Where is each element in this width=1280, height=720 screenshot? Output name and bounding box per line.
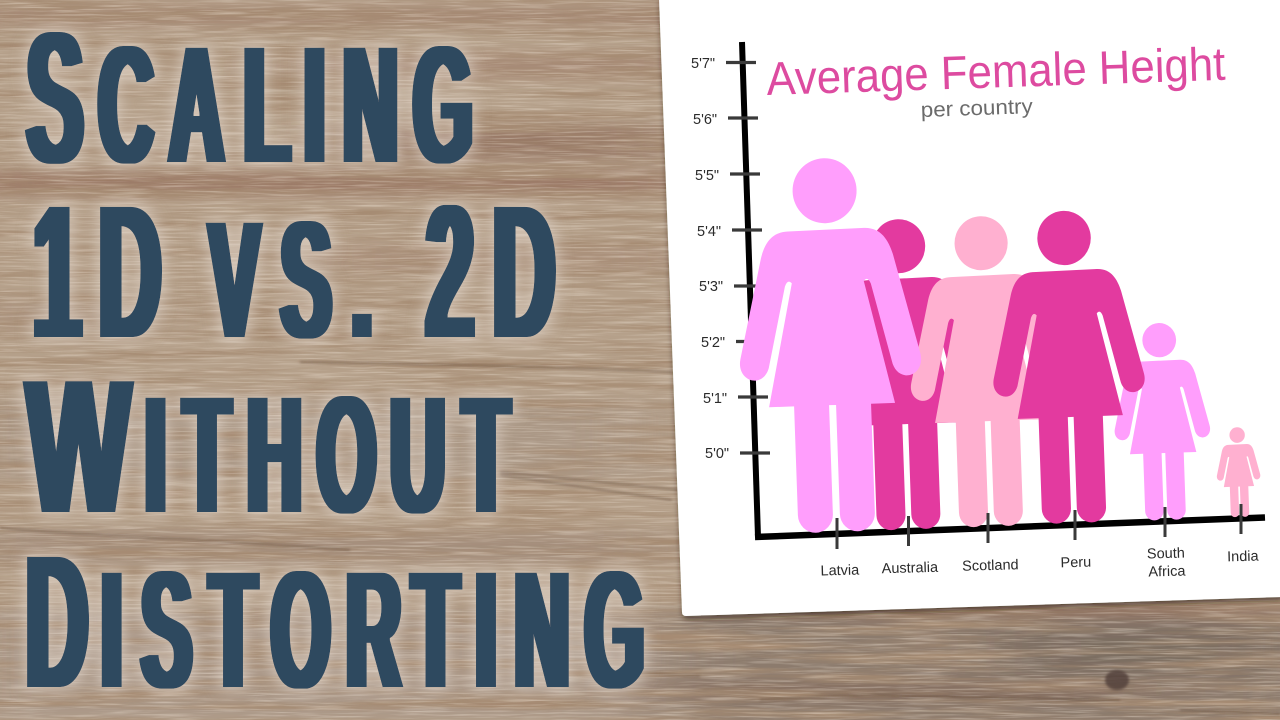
x axis labels: Africa (1148, 563, 1187, 580)
chart title: Average Female Height (766, 37, 1226, 105)
y axis labels: 5'1" (703, 391, 727, 407)
x axis ticks (837, 504, 1241, 549)
y axis labels: 5'4" (697, 224, 721, 240)
title line: 1D vs. 2D: 1D (33, 164, 161, 379)
x axis labels: Latvia (820, 562, 860, 580)
y axis ticks (726, 62, 770, 453)
figure: Scotland (905, 214, 1066, 529)
title line: Scaling: CALING (99, 10, 473, 199)
title line: Distorting: ISTORTING (101, 535, 644, 720)
y axis labels (691, 56, 729, 462)
figure: Peru (987, 208, 1150, 526)
x axis labels: Scotland (962, 557, 1019, 575)
x axis labels: India (1227, 549, 1260, 565)
x axis labels: Peru (1060, 555, 1091, 571)
paper card with chart (659, 0, 1280, 616)
y axis labels: 5'7" (691, 56, 715, 72)
y axis labels: 5'3" (699, 279, 723, 295)
title line: 1D vs. 2D: 2D (426, 164, 555, 379)
title line: Without (27, 340, 509, 555)
x axis labels: Australia (881, 560, 939, 577)
y axis labels: 5'2" (701, 335, 725, 351)
chart subtitle: per country (920, 95, 1034, 122)
figure: India (1215, 427, 1262, 518)
white paper sheet (659, 0, 1280, 616)
title line: 1D vs. 2D: VS. (209, 185, 373, 374)
x axis labels: South (1147, 546, 1185, 562)
x axis labels (820, 546, 1260, 580)
figure: South Africa (1111, 321, 1213, 522)
y axis labels: 5'6" (693, 112, 717, 128)
figure: Latvia (733, 155, 927, 535)
title: Scaling 1D vs. 2D Without Distorting (26, 0, 644, 720)
y axis labels: 5'5" (695, 168, 719, 184)
title line: Without: W (27, 340, 131, 555)
y axis labels: 5'0" (705, 446, 729, 462)
title line: Without: ITHOUT (145, 360, 509, 549)
chart axes (742, 42, 1265, 537)
figure: Australia (822, 217, 984, 532)
